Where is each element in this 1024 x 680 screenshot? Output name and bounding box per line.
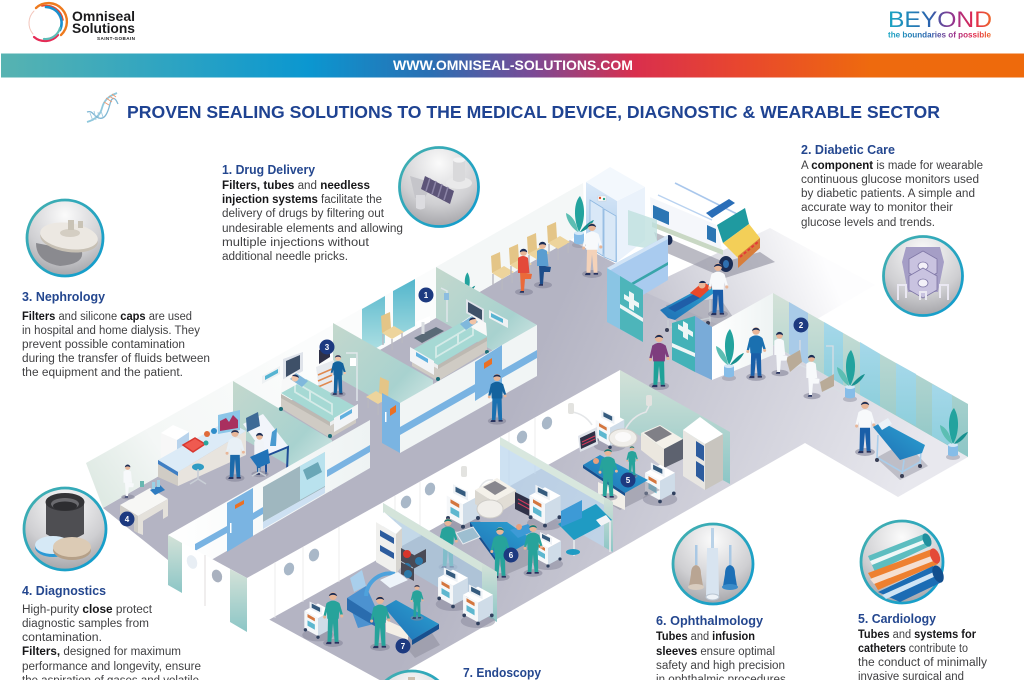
wall monitor <box>515 492 533 518</box>
logo wordmark: SAINT-GOBAIN <box>97 36 136 41</box>
wall stripes <box>789 302 952 447</box>
surgical lamp <box>477 500 503 518</box>
OR 5 contents <box>568 395 723 510</box>
ambulance bonnet and bumper <box>723 224 760 268</box>
text: ophthalmology <box>656 613 789 680</box>
beige disc <box>53 537 91 560</box>
plant: wall block <box>716 329 744 381</box>
body: safety and high precision <box>656 660 785 672</box>
iv stand two <box>825 346 841 392</box>
number badge 5 <box>620 472 636 488</box>
chair <box>381 312 404 350</box>
side machine <box>533 532 563 570</box>
orange tube <box>868 547 942 590</box>
lift <box>586 167 645 262</box>
ambulance body <box>650 180 745 255</box>
anesthesia cart <box>444 484 482 532</box>
body: Filters and silicone caps are used <box>22 311 192 323</box>
nurse <box>330 355 346 397</box>
body <box>801 160 983 229</box>
icon: product 6 vials <box>673 524 753 604</box>
number badge 2: 2 <box>799 321 804 330</box>
nurse right wing <box>746 327 766 381</box>
door: room 1 <box>475 345 502 401</box>
equipment trolley <box>414 316 444 343</box>
blue stripe <box>400 350 537 435</box>
text: drug delivery <box>222 162 403 263</box>
divider: OR 6 and OR 5 <box>500 437 613 552</box>
seated technician <box>250 433 270 477</box>
hex nuts <box>909 251 937 298</box>
surgeon front <box>490 527 510 581</box>
body: Filters, tubes and needless <box>222 180 370 192</box>
body <box>858 629 987 680</box>
operating block side wall <box>168 535 247 632</box>
blue vial <box>722 545 738 590</box>
chair <box>366 377 389 415</box>
tube <box>410 176 433 210</box>
iv stand <box>346 353 357 401</box>
stool <box>190 464 206 484</box>
body: multiple injections without <box>222 237 370 249</box>
right wing wall <box>773 293 968 457</box>
glass vestibule lower and wall <box>672 293 773 380</box>
icon: DNA helix <box>87 93 118 122</box>
room 3 contents <box>262 340 389 438</box>
body <box>22 604 201 680</box>
blue disc <box>35 536 71 557</box>
ribbed cap <box>46 493 84 540</box>
room block front wall with doors <box>382 325 537 453</box>
body: High-purity close protect <box>22 604 153 616</box>
windshield <box>717 208 749 243</box>
walking man <box>649 334 670 390</box>
sample rack <box>140 480 165 495</box>
icon: product 4 closures <box>24 488 106 570</box>
beakers <box>204 428 217 446</box>
OR 7 contents <box>302 512 495 658</box>
surgeon left <box>323 592 343 647</box>
seated scientist <box>121 465 135 500</box>
portholes <box>185 554 224 584</box>
ports <box>68 220 83 230</box>
patient <box>668 281 712 312</box>
body: continuous glucose monitors used <box>801 174 979 186</box>
wall screen <box>218 410 240 434</box>
number badge 4 <box>120 512 134 526</box>
number badge 6: 6 <box>509 551 514 560</box>
body: catheters contribute to <box>858 643 968 655</box>
back wall: lab and patient rooms <box>86 267 436 508</box>
number badge 1: 1 <box>424 291 429 300</box>
panel: room 1 curtains <box>362 279 415 356</box>
sink <box>475 478 516 516</box>
lab bench <box>158 421 246 486</box>
divider: room 1 right <box>436 267 537 376</box>
OR 6 contents <box>439 466 612 581</box>
stretcher frame <box>665 300 710 332</box>
header: Beyond logo <box>888 7 992 40</box>
stretcher frame <box>875 435 922 478</box>
teal door panel <box>620 276 643 342</box>
body: the equipment and the patient. <box>22 367 183 379</box>
number badge 2 <box>794 318 808 332</box>
feet <box>898 285 948 300</box>
body: A component is made for wearable <box>801 160 983 172</box>
window <box>263 452 325 529</box>
OR 5 wall <box>620 370 730 484</box>
iv stand <box>441 288 449 322</box>
icon: product 7 endoscopy <box>372 671 452 680</box>
body: the conduct of minimally <box>858 657 987 669</box>
desk <box>243 412 288 474</box>
waiting patient: man <box>534 242 552 288</box>
nurse at lift <box>582 223 602 278</box>
waiting patient: woman <box>515 249 533 295</box>
flange fitting <box>446 157 472 189</box>
body <box>222 180 403 263</box>
waiting chairs <box>491 222 570 290</box>
heading: 3. Nephrology <box>22 289 106 304</box>
blue tube <box>878 564 946 602</box>
machine <box>643 462 677 506</box>
cart by surgeon <box>302 601 334 641</box>
room 1 contents <box>381 288 508 381</box>
hospital floor plan <box>86 167 968 680</box>
body: Tubes and systems for <box>858 629 976 641</box>
stretcher mattress <box>873 418 925 460</box>
body: injection systems facilitate the <box>222 194 382 206</box>
sink <box>641 425 683 468</box>
small wall lights <box>461 466 493 498</box>
icon: product 5 tubes <box>861 521 946 603</box>
plant: by lift <box>566 196 594 248</box>
body: sleeves ensure optimal <box>656 646 775 658</box>
heading: 5. Cardiology <box>858 611 937 626</box>
paramedic <box>708 263 728 318</box>
bed <box>410 315 489 381</box>
logo wordmark <box>72 9 136 41</box>
disc <box>38 219 100 256</box>
text: cardiology <box>858 611 987 680</box>
website bar <box>1 54 1024 78</box>
tall cabinet <box>376 512 402 574</box>
body <box>656 631 789 680</box>
logo wordmark: Solutions <box>72 21 135 36</box>
surgeon behind <box>626 446 638 478</box>
icon: product 3 filter disc <box>27 200 103 276</box>
body: undesirable elements and allowing <box>222 223 403 235</box>
body: glucose levels and trends. <box>801 217 935 229</box>
heading: 2. Diabetic Care <box>801 142 895 157</box>
surgical table <box>470 522 540 575</box>
blue stripe <box>195 445 370 551</box>
body <box>22 311 210 379</box>
beyond word: BEYOND <box>888 7 992 32</box>
dialysis patient one <box>771 332 802 376</box>
monitor bank <box>401 548 426 581</box>
door <box>227 488 253 552</box>
surgeon front <box>599 449 618 501</box>
surgeon rear <box>411 585 424 621</box>
icon: product 2 glucose component <box>884 236 962 316</box>
number badge 7 <box>396 638 410 654</box>
heading: 1. Drug Delivery <box>222 162 316 177</box>
text: endoscopy: 7. Endoscopy <box>463 665 542 680</box>
door: room 3 <box>382 393 400 453</box>
desk with monitor <box>558 500 612 556</box>
right wing stretcher and porter <box>855 401 928 480</box>
ambulance wheels <box>666 235 733 272</box>
disc shadow <box>36 243 82 266</box>
logo ring <box>29 3 67 41</box>
surgeon front <box>370 596 390 651</box>
body: delivery of drugs by filtering out <box>222 208 385 220</box>
cabinet <box>683 417 723 490</box>
teal tube <box>868 532 933 572</box>
divider: room 3 and room 1 <box>333 323 433 431</box>
stretcher mattress <box>660 283 714 320</box>
body: performance and longevity, ensure <box>22 661 201 673</box>
beige vial <box>688 545 704 590</box>
beyond tagline: the boundaries of possible <box>888 30 991 40</box>
clear tube <box>706 528 719 600</box>
glass vestibule upper <box>607 210 668 342</box>
ambulance <box>650 180 775 278</box>
red tray <box>183 438 205 452</box>
divider: OR 7 and OR 6 <box>383 503 497 622</box>
logo wordmark: Omniseal <box>72 9 135 24</box>
body: Tubes and infusion <box>656 631 755 643</box>
seal stem <box>408 677 415 680</box>
wall monitor <box>578 427 598 452</box>
wall AC unit <box>262 366 280 384</box>
number badge 3: 3 <box>325 343 330 352</box>
body: contamination. <box>22 632 102 644</box>
title: PROVEN SEALING SOLUTIONS TO THE MEDICAL DEVICE, DIAGNOSTIC & WEARABLE SECTOR <box>127 102 940 122</box>
wall AC unit <box>489 310 508 328</box>
trolley <box>456 527 480 544</box>
number badge 4: 4 <box>125 515 130 524</box>
medical cross <box>624 291 639 311</box>
ventilator right <box>461 584 495 628</box>
patient head <box>593 458 599 464</box>
back wall: waiting area <box>436 183 585 318</box>
website url: WWW.OMNISEAL-SOLUTIONS.COM <box>393 58 633 73</box>
lab contents <box>120 410 288 535</box>
body: Filters, designed for maximum <box>22 646 181 658</box>
patient <box>510 524 534 538</box>
wall lights <box>568 395 652 430</box>
scientist <box>226 430 245 482</box>
c-arm <box>347 570 408 628</box>
surgical table <box>384 600 440 658</box>
body: additional needle pricks. <box>222 251 348 263</box>
number badge 6 <box>504 548 518 562</box>
surgeon left <box>439 519 458 571</box>
ribbed filter <box>421 176 454 204</box>
header: Omniseal logo <box>29 3 136 41</box>
medical cross <box>678 321 693 340</box>
front table <box>120 488 168 535</box>
body: in hospital and home dialysis. They <box>22 325 200 337</box>
wall monitor <box>283 352 303 382</box>
operating block back wall <box>247 370 620 632</box>
plant: right wing end <box>940 408 968 460</box>
body: accurate way to monitor their <box>801 202 953 214</box>
surgeon right <box>524 525 543 577</box>
plant: right wing centre <box>837 350 865 402</box>
ambulance bay floor <box>640 228 875 345</box>
plant: waiting corridor left <box>460 272 475 301</box>
surgical lamp <box>609 429 637 447</box>
porter <box>855 401 875 456</box>
heading: 6. Ophthalmology <box>656 613 764 628</box>
frame <box>902 247 944 292</box>
nurse by room 1 <box>488 374 507 425</box>
body: diagnostic samples from <box>22 618 149 630</box>
stretcher with patient <box>660 263 735 340</box>
text: nephrology <box>22 289 210 379</box>
white wall block <box>712 293 773 380</box>
ventilator left <box>436 567 470 611</box>
divider: lab and room 3 <box>233 381 332 491</box>
floor <box>103 240 968 680</box>
ventilator <box>527 485 563 530</box>
lift doors <box>590 200 616 262</box>
dialysis patient two <box>803 355 834 399</box>
lift signal <box>598 196 606 201</box>
infusion tower <box>316 344 336 396</box>
body: during the transfer of fluids between <box>22 353 210 365</box>
ambulance window <box>653 205 716 243</box>
icon: product 1 connector <box>400 148 478 226</box>
iv stand one <box>794 340 807 368</box>
body: prevent possible contamination <box>22 339 185 351</box>
white wall <box>400 325 537 453</box>
heading: 4. Diagnostics <box>22 583 106 598</box>
text: diagnostics <box>22 583 201 680</box>
number badge 7: 7 <box>401 642 406 651</box>
ambulance shadow <box>654 232 775 278</box>
number badge 5: 5 <box>626 476 631 485</box>
portholes <box>282 415 554 577</box>
wall monitor <box>466 299 484 323</box>
surgical table <box>583 455 660 510</box>
body: by diabetic patients. A simple and <box>801 188 975 200</box>
bed <box>279 372 358 438</box>
cabinet <box>161 425 189 482</box>
anesthesia machine <box>594 410 626 452</box>
lab front wall <box>168 420 370 585</box>
text: diabetic care <box>801 142 983 229</box>
